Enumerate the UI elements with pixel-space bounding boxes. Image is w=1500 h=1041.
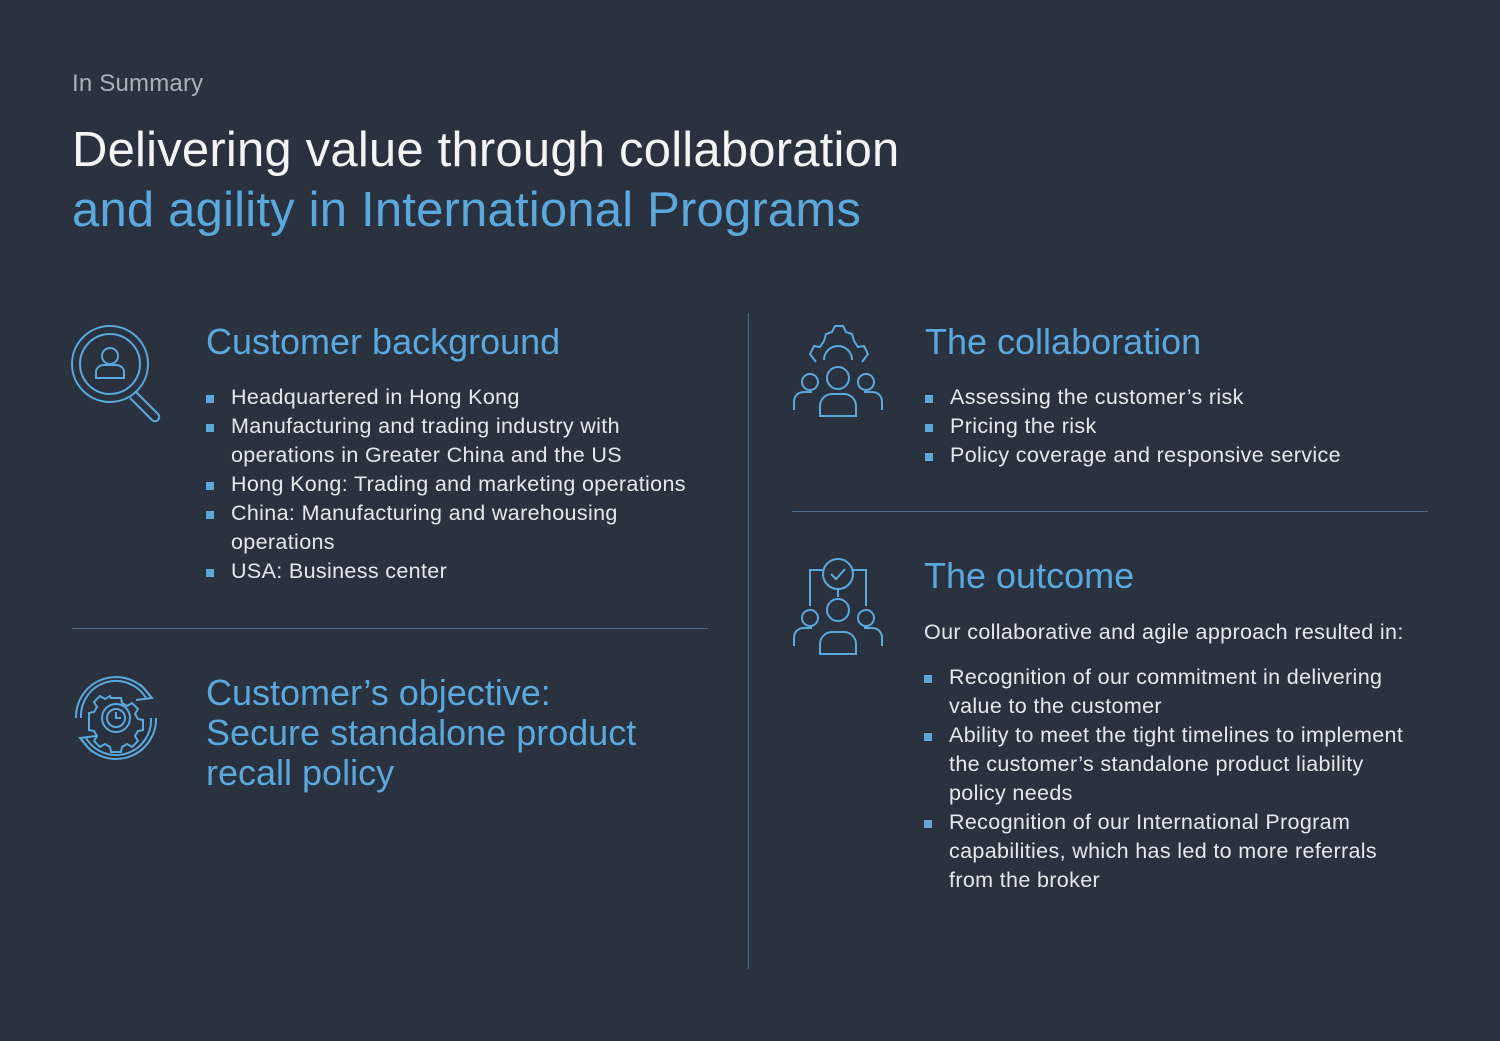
bullet list: operations in Greater China and the US: [231, 443, 622, 467]
title: Delivering value through collaboration: [72, 123, 900, 177]
bullet list: Assessing the customer’s risk: [950, 385, 1244, 409]
panel: customer background: [206, 321, 686, 583]
bullet list: capabilities, which has led to more referrals: [949, 839, 1377, 863]
vertical divider: [748, 313, 749, 969]
bullet list: USA: Business center: [231, 559, 447, 583]
bullet list: [206, 385, 686, 583]
bullet list: policy needs: [949, 781, 1073, 805]
bullet list: [925, 385, 1341, 467]
title: [72, 123, 900, 237]
panel: the outcome: [924, 555, 1404, 892]
heading: The outcome: [924, 555, 1134, 596]
panel: customer objective: recall policy: [206, 752, 394, 793]
panel: customer objective: [206, 672, 636, 793]
horizontal rule right: [792, 511, 1428, 512]
bullet list: value to the customer: [949, 694, 1162, 718]
panel: customer objective: Customer’s objective:: [206, 672, 551, 713]
bullet list: Recognition of our International Program: [949, 810, 1350, 834]
panel: the collaboration: [925, 321, 1341, 467]
bullet list: the customer’s standalone product liability: [949, 752, 1364, 776]
icon: collaboration team gear: [793, 325, 883, 417]
kicker: In Summary: [72, 70, 203, 97]
panel: customer objective: Secure standalone product: [206, 712, 636, 753]
bullet list: Policy coverage and responsive service: [950, 443, 1341, 467]
icon: magnifier person: [71, 325, 160, 422]
bullet list: China: Manufacturing and warehousing: [231, 501, 618, 525]
heading: Customer background: [206, 321, 560, 362]
icon: gear cycle: [75, 676, 157, 760]
bullet list: Recognition of our commitment in delivering: [949, 665, 1382, 689]
title: and agility in International Programs: [72, 183, 861, 237]
bullet list: Headquartered in Hong Kong: [231, 385, 520, 409]
bullet list: operations: [231, 530, 335, 554]
bullet list: [924, 665, 1403, 892]
bullet list: Manufacturing and trading industry with: [231, 414, 620, 438]
bullet list: Ability to meet the tight timelines to implement: [949, 723, 1403, 747]
horizontal rule left: [72, 628, 708, 629]
heading: The collaboration: [925, 321, 1201, 362]
bullet list: Hong Kong: Trading and marketing operations: [231, 472, 686, 496]
bullet list: from the broker: [949, 868, 1100, 892]
bullet list: Pricing the risk: [950, 414, 1097, 438]
icon: team check: [793, 558, 883, 655]
intro text: Our collaborative and agile approach resulted in:: [924, 620, 1404, 644]
